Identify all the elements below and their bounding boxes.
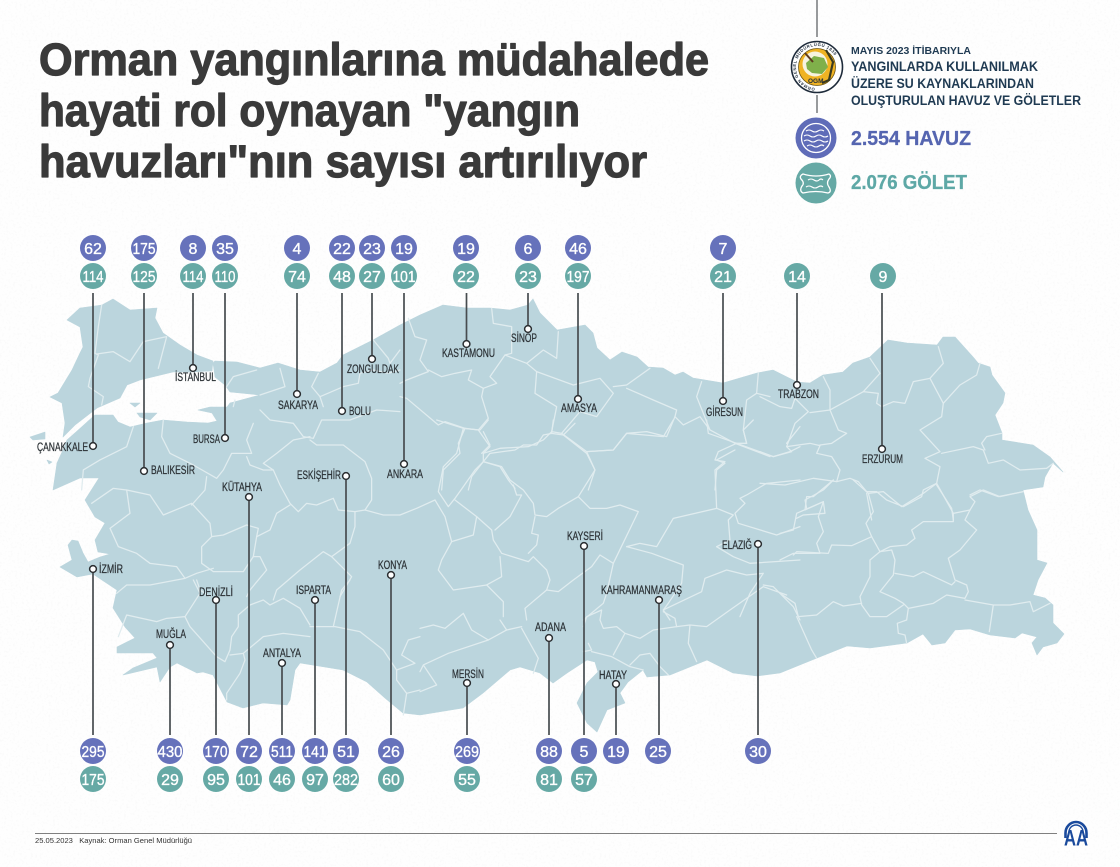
marker: İstanbul: İSTANBUL bbox=[175, 371, 216, 384]
legend heading: OLUŞTURULAN HAVUZ VE GÖLETLER bbox=[851, 93, 1081, 108]
legend: lakes count: 2.076 GÖLET bbox=[851, 171, 967, 194]
icon: Orman Genel Müdürlüğü logo: OGM bbox=[808, 78, 824, 85]
legend heading: MAYIS 2023 İTİBARIYLA bbox=[851, 44, 971, 57]
marker: Kahramanmaraş: KAHRAMANMARAŞ bbox=[601, 585, 682, 597]
marker: Amasya: 46 bbox=[569, 241, 587, 258]
marker: Sakarya bbox=[278, 235, 318, 412]
marker: Sakarya: 74 bbox=[288, 269, 306, 286]
marker: Konya: 26 bbox=[382, 744, 400, 761]
marker: Giresun: GİRESUN bbox=[706, 406, 743, 419]
marker: Bursa: BURSA bbox=[193, 434, 220, 446]
map of Turkey bbox=[30, 299, 1064, 732]
marker: Muğla: 430 bbox=[158, 744, 183, 761]
marker: Bursa: 110 bbox=[214, 269, 236, 286]
title bbox=[39, 34, 709, 187]
marker: Hatay: 19 bbox=[607, 744, 625, 761]
marker: Ankara: 19 bbox=[395, 241, 413, 258]
marker: Amasya bbox=[561, 235, 597, 415]
marker: Çanakkale: ÇANAKKALE bbox=[37, 442, 88, 454]
marker: Erzurum bbox=[862, 263, 903, 466]
marker: İstanbul bbox=[175, 235, 216, 384]
marker: Isparta: 97 bbox=[306, 772, 324, 789]
map: land bbox=[30, 299, 1064, 732]
marker: Eskişehir: ESKİŞEHİR bbox=[297, 469, 341, 482]
legend heading bbox=[851, 44, 1081, 108]
marker: Balıkesir: 125 bbox=[132, 269, 156, 286]
marker: Elazığ: ELAZIĞ bbox=[722, 539, 752, 552]
legend heading: YANGINLARDA KULLANILMAK bbox=[851, 59, 1038, 74]
marker: Kütahya bbox=[222, 482, 262, 792]
marker: Eskişehir: 282 bbox=[334, 772, 358, 789]
title: havuzları"nın sayısı artırılıyor bbox=[39, 136, 647, 187]
marker: Isparta: 141 bbox=[304, 744, 327, 761]
marker: Eskişehir bbox=[297, 469, 359, 792]
icon: AA logo: AA bbox=[1064, 826, 1088, 850]
map: province borders bbox=[82, 305, 1053, 715]
marker: Denizli: DENİZLİ bbox=[199, 586, 233, 599]
marker: Bolu: 48 bbox=[333, 269, 351, 286]
marker: İzmir: İZMİR bbox=[99, 563, 123, 576]
icon: pond bbox=[796, 118, 836, 158]
marker: Hatay bbox=[599, 670, 629, 764]
marker: Bolu bbox=[329, 235, 371, 418]
marker: Konya bbox=[378, 560, 407, 792]
marker: Mersin: 269 bbox=[455, 744, 479, 761]
marker: İstanbul: 8 bbox=[189, 241, 198, 258]
marker: İzmir: 175 bbox=[82, 772, 105, 789]
marker: Sinop: SİNOP bbox=[511, 332, 537, 345]
marker: Sakarya: 4 bbox=[293, 241, 302, 258]
marker: Kayseri: KAYSERİ bbox=[567, 530, 603, 543]
source note: 25.05.2023 Kaynak: Orman Genel Müdürlüğü bbox=[35, 836, 192, 845]
marker: Balıkesir: 175 bbox=[132, 241, 156, 258]
marker: Erzurum: 9 bbox=[879, 269, 888, 286]
marker: Trabzon bbox=[778, 263, 819, 401]
marker: Amasya: AMASYA bbox=[561, 403, 597, 415]
marker: Kütahya: KÜTAHYA bbox=[222, 482, 262, 494]
marker: Muğla: 29 bbox=[161, 772, 179, 789]
title: Orman yangınlarına müdahalede bbox=[39, 34, 709, 85]
marker: Konya: KONYA bbox=[378, 560, 407, 572]
marker: Denizli: 170 bbox=[204, 744, 228, 761]
marker: Bursa bbox=[193, 235, 238, 446]
marker: İzmir bbox=[80, 563, 123, 792]
marker: Çanakkale: 114 bbox=[82, 269, 104, 286]
marker: Kütahya: 101 bbox=[238, 772, 261, 789]
marker: Ankara: 101 bbox=[392, 269, 416, 286]
icon: Orman Genel Müdürlüğü logo: ORMAN GENEL MÜDÜRLÜĞÜ 1839 bbox=[793, 42, 836, 91]
marker: Balıkesir bbox=[131, 235, 195, 477]
marker: Eskişehir: 51 bbox=[337, 744, 355, 761]
marker: Trabzon: 14 bbox=[788, 269, 806, 286]
marker: Kahramanmaraş: 25 bbox=[649, 744, 667, 761]
marker: Giresun: 7 bbox=[719, 241, 728, 258]
legend: ponds count: 2.554 HAVUZ bbox=[851, 128, 971, 150]
marker: Antalya bbox=[263, 648, 301, 792]
marker: Elazığ: 30 bbox=[749, 744, 767, 761]
marker: Zonguldak: 23 bbox=[363, 241, 381, 258]
title: hayati rol oynayan "yangın bbox=[39, 85, 580, 136]
marker: Mersin: 55 bbox=[458, 772, 476, 789]
marker: Kütahya: 72 bbox=[240, 744, 258, 761]
marker: Antalya: 511 bbox=[271, 744, 293, 761]
marker: Giresun bbox=[706, 235, 743, 419]
marker: Kahramanmaraş bbox=[601, 585, 682, 764]
footer bbox=[35, 822, 1088, 850]
marker: Kayseri: 57 bbox=[575, 772, 593, 789]
marker: Kayseri bbox=[567, 530, 603, 792]
marker: Bursa: 35 bbox=[216, 241, 234, 258]
marker: Kastamonu bbox=[442, 235, 495, 360]
marker: Kastamonu: 19 bbox=[457, 241, 475, 258]
marker: Adana bbox=[535, 622, 566, 792]
marker: Giresun: 21 bbox=[714, 269, 732, 286]
marker: Kastamonu: KASTAMONU bbox=[442, 348, 495, 360]
marker: Muğla: MUĞLA bbox=[156, 628, 186, 641]
marker: Mersin bbox=[452, 668, 484, 792]
marker: Zonguldak: 27 bbox=[363, 269, 381, 286]
marker: Denizli: 95 bbox=[207, 772, 225, 789]
marker: İzmir: 295 bbox=[82, 744, 105, 761]
marker: Balıkesir: BALIKESİR bbox=[151, 464, 195, 477]
marker: Denizli bbox=[199, 586, 233, 792]
marker: Bolu: BOLU bbox=[349, 406, 371, 418]
marker: Ankara bbox=[387, 235, 423, 481]
marker: Bolu: 22 bbox=[333, 241, 351, 258]
icon: lake bbox=[796, 162, 836, 204]
marker: Konya: 60 bbox=[382, 772, 400, 789]
marker: Isparta bbox=[296, 585, 331, 792]
marker: Antalya: ANTALYA bbox=[263, 648, 301, 660]
legend heading: ÜZERE SU KAYNAKLARINDAN bbox=[851, 76, 1034, 91]
marker: Mersin: MERSİN bbox=[452, 668, 484, 681]
marker: Kastamonu: 22 bbox=[457, 269, 475, 286]
marker: Adana: 81 bbox=[540, 772, 558, 789]
marker: Amasya: 197 bbox=[566, 269, 590, 286]
marker: Hatay: HATAY bbox=[599, 670, 627, 682]
icon: AA logo bbox=[1064, 822, 1088, 850]
marker: Adana: ADANA bbox=[535, 622, 566, 634]
marker: Sinop: 23 bbox=[519, 269, 537, 286]
marker: Muğla bbox=[156, 628, 186, 792]
marker: Antalya: 46 bbox=[273, 772, 291, 789]
marker: Elazığ bbox=[722, 539, 771, 764]
marker: Sinop bbox=[511, 235, 541, 345]
marker: Isparta: ISPARTA bbox=[296, 585, 331, 597]
marker: Zonguldak: ZONGULDAK bbox=[347, 364, 399, 376]
marker: Sakarya: SAKARYA bbox=[278, 400, 318, 412]
marker: Ankara: ANKARA bbox=[387, 469, 423, 481]
marker: Çanakkale: 62 bbox=[84, 241, 102, 258]
marker: Kayseri: 5 bbox=[580, 744, 589, 761]
legend bbox=[790, 0, 1081, 204]
marker: Çanakkale bbox=[37, 235, 106, 454]
marker: Adana: 88 bbox=[540, 744, 558, 761]
marker: Erzurum: ERZURUM bbox=[862, 454, 903, 466]
marker: İstanbul: 114 bbox=[182, 269, 204, 286]
marker: Zonguldak bbox=[347, 235, 399, 376]
marker: Sinop: 6 bbox=[524, 241, 533, 258]
marker: Trabzon: TRABZON bbox=[778, 389, 819, 401]
